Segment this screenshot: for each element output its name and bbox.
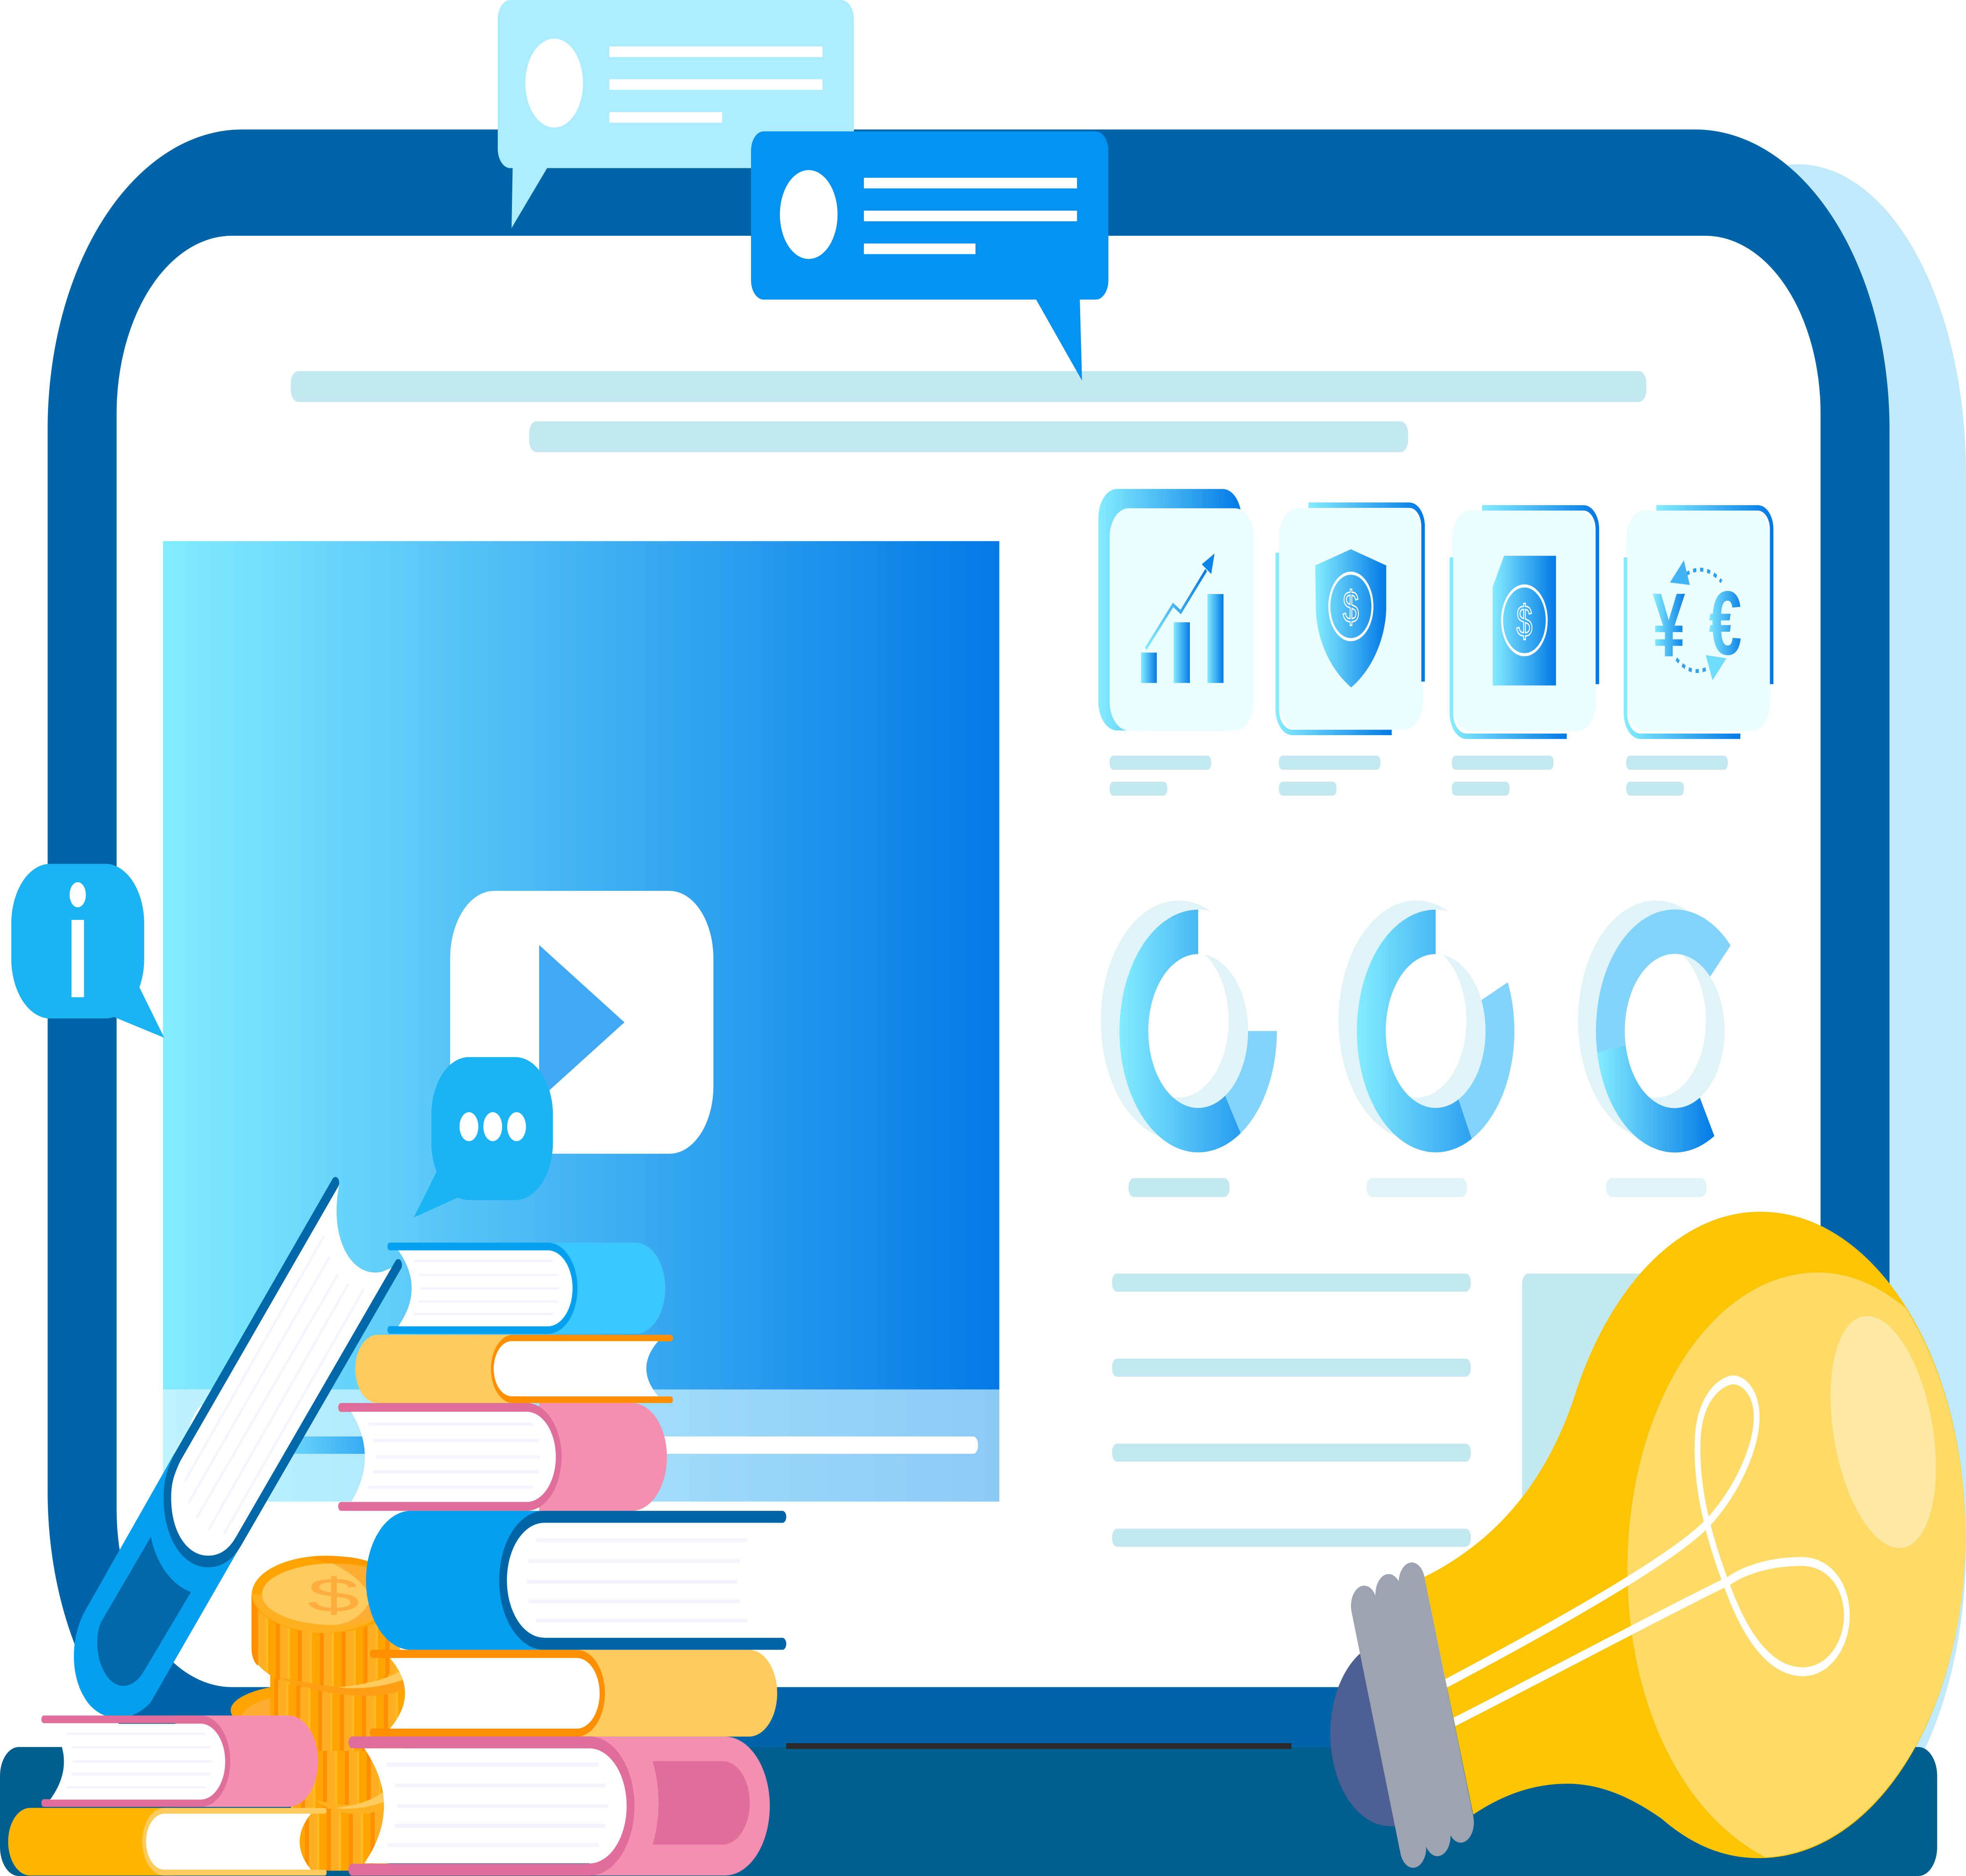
coin 4 — [291, 1809, 389, 1870]
binding outline — [168, 1183, 398, 1561]
icon card: currency exchange: ¥ — [1653, 575, 1685, 676]
glass light side — [1627, 1273, 1965, 1857]
donut chart 2 — [1338, 901, 1500, 1140]
coin 1 — [252, 1556, 402, 1688]
book: bottom yellow — [8, 1808, 325, 1876]
glass body — [1424, 1212, 1965, 1858]
donut captions — [1128, 1178, 1706, 1197]
video player — [163, 541, 999, 1502]
icon captions — [1110, 756, 1728, 796]
icon card: currency exchange: € — [1709, 573, 1741, 674]
coin 2 rim — [278, 1671, 403, 1696]
progress track — [251, 1436, 978, 1454]
icon card: shield — [1277, 505, 1423, 732]
filament — [1446, 1380, 1847, 1722]
coin 2 — [231, 1662, 408, 1751]
icon card: currency exchange — [1625, 508, 1772, 736]
cover — [74, 1454, 240, 1718]
text lines — [1112, 1274, 1471, 1547]
book: yellow — [355, 1335, 671, 1403]
bulb cap — [1330, 1641, 1451, 1826]
donut chart 3 — [1578, 901, 1739, 1140]
book: pink — [341, 1403, 667, 1511]
screw base — [1364, 1583, 1461, 1847]
device base — [0, 1747, 1937, 1876]
icon card: money document: $ — [1517, 597, 1532, 646]
book: slanted open — [74, 1183, 398, 1718]
book stack — [8, 1243, 782, 1876]
glass highlight — [1811, 1293, 1955, 1571]
control knob sliver — [188, 1405, 207, 1434]
coin stack — [231, 1556, 408, 1870]
light bulb — [1330, 1212, 1965, 1858]
book: big pink — [352, 1736, 770, 1876]
coin 1: $ — [307, 1568, 360, 1622]
book: orange — [372, 1650, 777, 1736]
image placeholder block — [1522, 1274, 1773, 1554]
icon card: shield: $ — [1343, 583, 1359, 632]
speech bubble: blue — [751, 131, 1108, 381]
icon card: money document — [1451, 508, 1597, 736]
book: small pink — [44, 1716, 318, 1807]
coin 3 — [291, 1749, 389, 1814]
video area — [163, 541, 999, 1389]
base highlight line — [786, 1743, 1291, 1749]
spine shade — [97, 1537, 191, 1686]
icon card: growth chart — [1098, 489, 1254, 730]
play button — [450, 891, 713, 1154]
heading placeholder lines — [291, 371, 1646, 452]
control bar — [163, 1389, 999, 1502]
info bubble — [11, 864, 164, 1038]
pale blue back panel — [1630, 164, 1966, 1855]
book: big blue — [366, 1511, 782, 1650]
page lines — [185, 1237, 363, 1534]
progress fill — [251, 1436, 370, 1454]
donut chart 1 — [1101, 901, 1263, 1140]
chat bubble: dots — [414, 1057, 553, 1218]
device screen — [117, 236, 1821, 1687]
pages — [168, 1184, 398, 1561]
speech bubble: light — [498, 0, 854, 228]
book: cyan — [390, 1243, 665, 1334]
